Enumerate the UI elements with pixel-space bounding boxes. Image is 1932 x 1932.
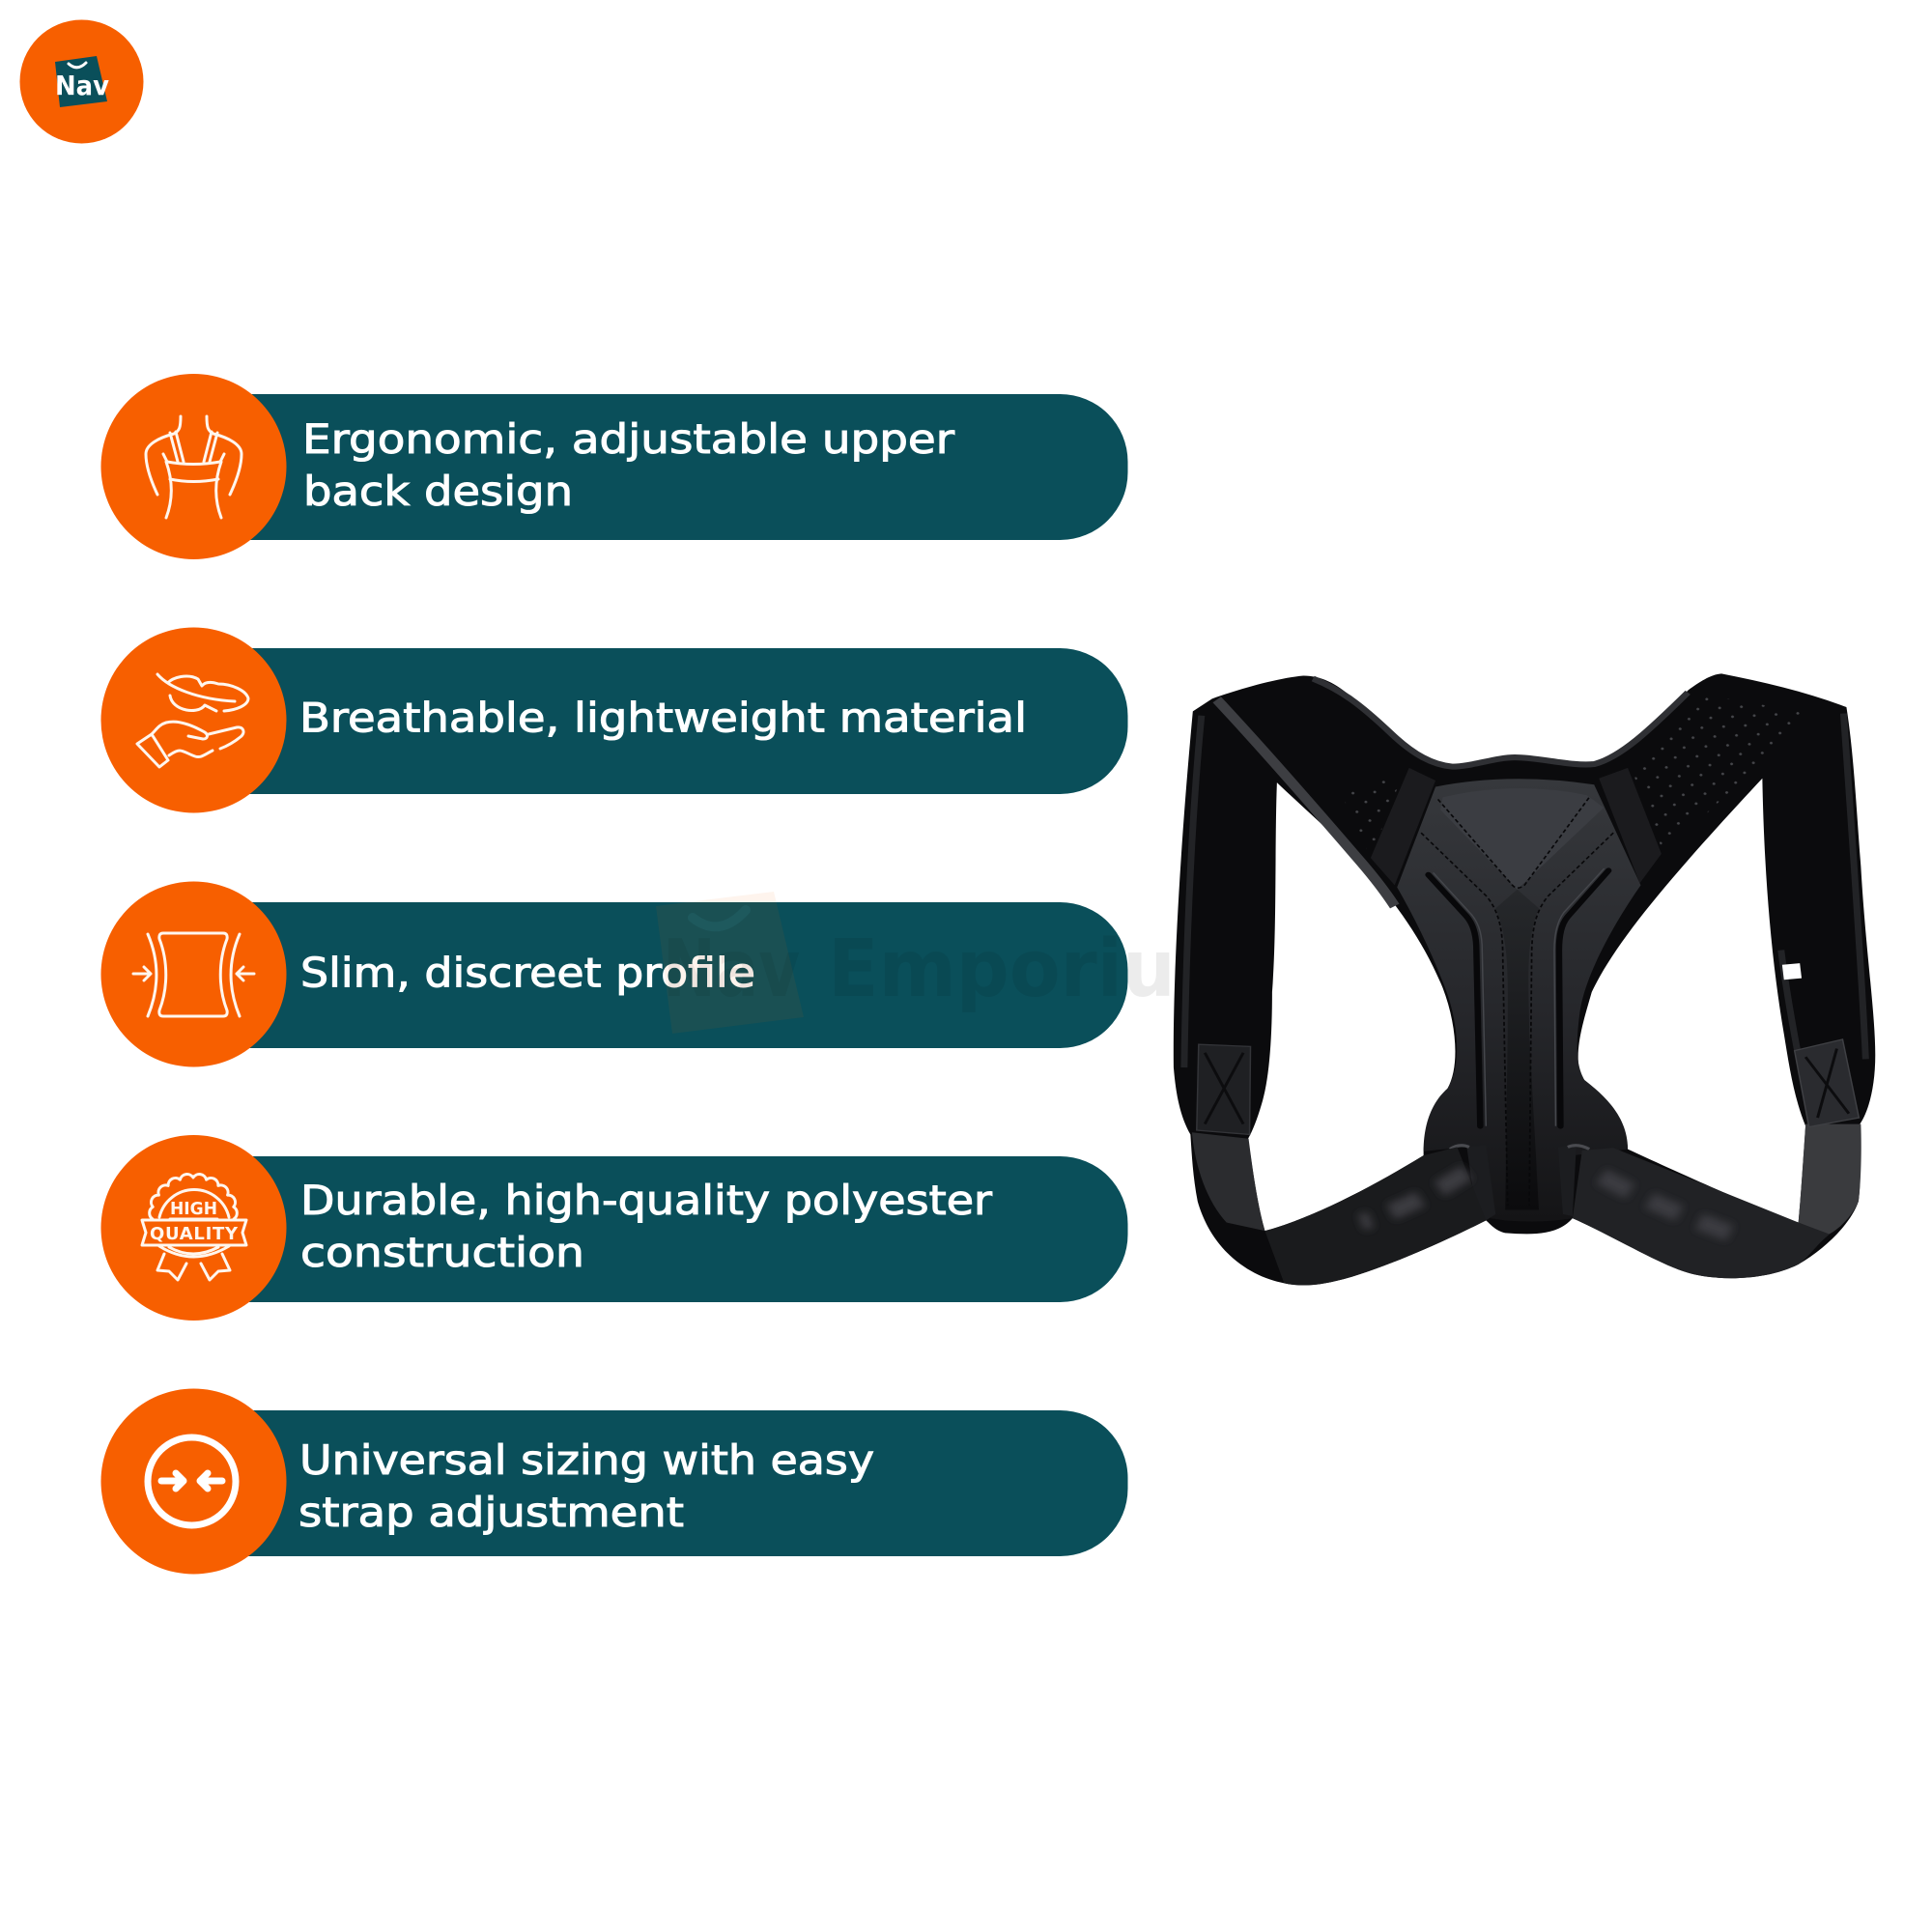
feature row 1: ergonomic design bbox=[100, 374, 1128, 559]
lower strap left bbox=[1192, 1132, 1264, 1231]
icon: sizing arrows in ring bbox=[148, 1437, 236, 1525]
webbing highlight bbox=[1361, 1172, 1736, 1236]
text: ergonomic design: Ergonomic, adjustable upper bbox=[302, 415, 955, 463]
logo badge: Nav bbox=[55, 70, 109, 101]
feature row 5: universal sizing bbox=[100, 1389, 1128, 1575]
shoulder pad left bbox=[1217, 699, 1395, 906]
text: slim profile: Slim, discreet profile bbox=[300, 949, 755, 997]
grooves bbox=[1429, 870, 1608, 1126]
back panel bbox=[1397, 779, 1640, 1221]
shoulder binding bbox=[1313, 679, 1688, 767]
text: universal sizing: Universal sizing with easy bbox=[299, 1436, 874, 1484]
mesh bands bbox=[1371, 768, 1662, 885]
adjuster straps bbox=[1466, 1145, 1577, 1220]
watermark: Nav bbox=[663, 923, 800, 1015]
webbing right bbox=[1573, 1148, 1830, 1278]
icon: slim waist arrows bbox=[133, 933, 254, 1016]
feature row 3: slim profile bbox=[100, 881, 1128, 1066]
shoulder pad left perforations bbox=[1342, 770, 1405, 858]
stitching bbox=[1421, 797, 1613, 1206]
watermark: Emporium bbox=[828, 923, 1253, 1015]
icon: upper back brace bbox=[146, 416, 242, 518]
product: posture corrector brace bbox=[1174, 673, 1875, 1286]
feature row 4: durable construction bbox=[100, 1135, 1128, 1321]
strap patch left bbox=[1197, 1044, 1251, 1134]
logo badge bbox=[19, 19, 143, 143]
buckles bbox=[1450, 1146, 1589, 1150]
icon: feather over hand bbox=[137, 674, 248, 767]
shield inset bbox=[1440, 788, 1604, 890]
shoulder pad right perforations bbox=[1633, 695, 1813, 854]
webbing left bbox=[1264, 1147, 1486, 1286]
strap patch right bbox=[1795, 1039, 1859, 1127]
watermark bbox=[656, 892, 1253, 1034]
spine bbox=[1495, 890, 1539, 1209]
brace silhouette bbox=[1174, 673, 1875, 1286]
patch stitches bbox=[1205, 1049, 1849, 1124]
lower strap right bbox=[1799, 1124, 1861, 1236]
text: durable construction: Durable, high-quality polyester bbox=[300, 1177, 993, 1224]
icon: high quality badge: HIGH bbox=[170, 1199, 217, 1219]
white tag bbox=[1782, 963, 1802, 980]
icon: high quality badge: QUALITY bbox=[150, 1224, 239, 1244]
strap edge highlights bbox=[1184, 714, 1865, 1093]
icon: high quality badge bbox=[142, 1175, 246, 1280]
text: breathable material: Breathable, lightweight material bbox=[299, 694, 1027, 742]
text: universal sizing: strap adjustment bbox=[298, 1489, 684, 1536]
text: ergonomic design: back design bbox=[303, 468, 573, 515]
feature row 2: breathable material bbox=[100, 628, 1128, 813]
text: durable construction: construction bbox=[300, 1229, 584, 1276]
